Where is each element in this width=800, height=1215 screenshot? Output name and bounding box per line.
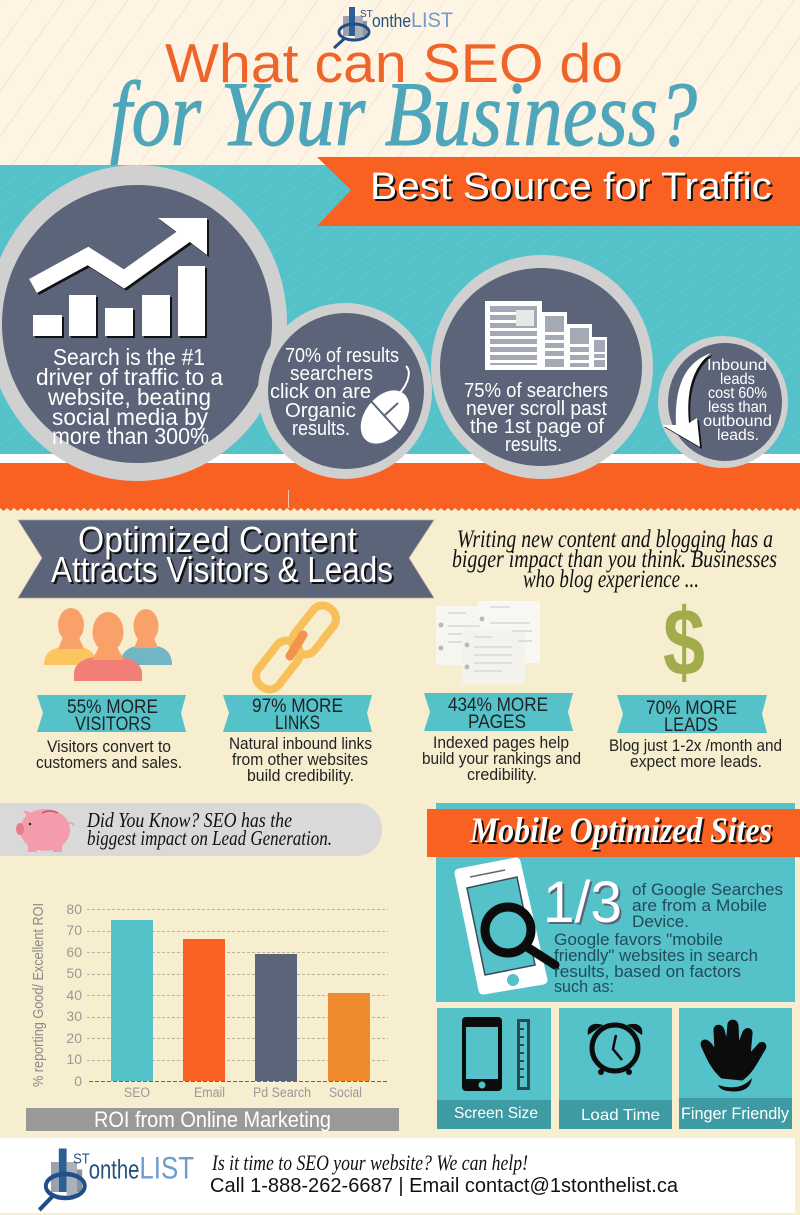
circle: organic results bbox=[258, 303, 432, 479]
text: inbound statistic: leads. bbox=[717, 427, 759, 444]
panel: more visitors bbox=[36, 608, 186, 772]
text: links description bbox=[229, 734, 372, 785]
text: lead generation fact: Did You Know? SEO has the bbox=[86, 808, 292, 832]
text: blogging intro: who blog experience ... bbox=[523, 566, 699, 593]
circle: inbound leads bbox=[658, 336, 788, 468]
logo: 1st on the list (footer): onthe bbox=[89, 1155, 139, 1185]
icon: phone and ruler bbox=[462, 1017, 530, 1091]
banner: optimized content: Optimized Content bbox=[78, 519, 357, 560]
x axis labels: Pd Search bbox=[253, 1085, 311, 1100]
text: inbound statistic bbox=[703, 357, 772, 444]
logo: 1st on the list (footer): ST bbox=[73, 1150, 90, 1167]
chart title: ROI from Online Marketing bbox=[94, 1107, 331, 1132]
text: pages description: Indexed pages help bbox=[433, 733, 569, 752]
text: search statistic: driver of traffic to a bbox=[36, 364, 223, 390]
icon: phone with magnifier bbox=[459, 862, 555, 990]
text: leads description: expect more leads. bbox=[630, 752, 762, 771]
text: search statistic bbox=[36, 344, 223, 449]
title bbox=[110, 32, 697, 165]
panel: mobile optimized sites bbox=[427, 803, 800, 1002]
text: inbound statistic: less than bbox=[708, 399, 767, 416]
ribbon: 70% more leads bbox=[617, 695, 767, 736]
y axis title: % reporting Good/ Excellent ROI bbox=[31, 903, 47, 1087]
y axis labels: 50 bbox=[66, 965, 82, 981]
text: call to action: Is it time to SEO your website? We can help! bbox=[211, 1150, 528, 1175]
banner: optimized content: Attracts Visitors & Leads bbox=[51, 549, 393, 590]
text: visitors description bbox=[36, 737, 182, 772]
text: mobile friendly: friendly" websites in search bbox=[554, 946, 758, 965]
text: google searches: of Google Searches bbox=[632, 880, 783, 899]
text: visitors description: Visitors convert to bbox=[47, 737, 171, 756]
icon: piggy bank bbox=[16, 809, 74, 852]
text: search statistic: more than 300% bbox=[52, 423, 209, 449]
logo: 1st on the list (footer) bbox=[39, 1148, 194, 1210]
text: pages description bbox=[422, 733, 581, 784]
text: search statistic: website, beating bbox=[47, 384, 211, 410]
panel: more leads bbox=[609, 589, 782, 771]
text: pages description: credibility. bbox=[467, 765, 537, 784]
panel: footer bbox=[0, 1138, 795, 1213]
text: scroll statistic: 75% of searchers bbox=[464, 380, 608, 402]
bars bbox=[111, 920, 370, 1081]
text: search statistic: social media by bbox=[52, 404, 208, 430]
banner: optimized content bbox=[18, 519, 434, 598]
y axis labels: 10 bbox=[66, 1051, 82, 1067]
icon: stacked documents bbox=[436, 601, 540, 684]
icon: dollar sign: $ bbox=[663, 589, 705, 696]
callout: did you know bbox=[0, 803, 382, 856]
text: organic statistic bbox=[270, 345, 399, 440]
text: inbound statistic: leads bbox=[720, 371, 755, 388]
title: for Your Business? bbox=[110, 63, 697, 165]
tile: finger friendly bbox=[679, 1008, 792, 1129]
logo: 1st on the list (header) bbox=[334, 7, 453, 48]
tile: load time bbox=[559, 1008, 672, 1129]
y axis labels: 20 bbox=[66, 1030, 82, 1046]
icon: shrinking result pages bbox=[485, 301, 607, 370]
x axis labels: Social bbox=[329, 1085, 362, 1100]
ribbon: 55% more visitors bbox=[37, 695, 186, 735]
text: inbound statistic: cost 60% bbox=[708, 385, 767, 402]
text: pages description: build your rankings and bbox=[422, 749, 581, 768]
y axis labels: 70 bbox=[66, 922, 82, 938]
ribbon: 55% more visitors: 55% MORE bbox=[67, 697, 158, 718]
text: links description: from other websites bbox=[232, 750, 368, 769]
icon: computer mouse bbox=[351, 366, 419, 453]
logo: 1st on the list (header): LIST bbox=[411, 9, 453, 32]
text: mobile friendly: results, based on factors bbox=[554, 962, 741, 981]
ribbon: 434% more pages bbox=[424, 693, 573, 733]
x axis labels bbox=[124, 1085, 362, 1100]
x axis labels: SEO bbox=[124, 1085, 150, 1100]
circle: first page of results bbox=[431, 255, 653, 479]
tile: screen size bbox=[437, 1008, 551, 1129]
text: lead generation fact: biggest impact on Lead Generation. bbox=[87, 826, 332, 850]
y axis labels: 60 bbox=[66, 944, 82, 960]
stat: one third: 1/3 bbox=[543, 870, 622, 935]
text: links description: build credibility. bbox=[247, 766, 354, 785]
panel: best source for traffic bbox=[0, 157, 800, 511]
text: blogging intro bbox=[452, 526, 777, 593]
text: scroll statistic: results. bbox=[505, 434, 562, 456]
icon: curved down arrow bbox=[662, 353, 711, 447]
text: scroll statistic bbox=[464, 380, 608, 456]
text: mobile friendly bbox=[554, 930, 758, 996]
text: google searches: Device. bbox=[632, 912, 689, 931]
icon: hand bbox=[702, 1021, 765, 1091]
text: visitors description: customers and sales. bbox=[36, 753, 182, 772]
panel: more links bbox=[223, 601, 372, 785]
text: contact details: Call 1-888-262-6687 | Email contact@1stonthelist.ca bbox=[210, 1175, 679, 1197]
circle: search is the number one driver bbox=[0, 165, 287, 481]
tile: load time: Load Time bbox=[581, 1107, 660, 1124]
y axis labels: 0 bbox=[74, 1073, 82, 1089]
icon: alarm clock bbox=[588, 1024, 642, 1075]
ribbon: 97% more links: 97% MORE bbox=[252, 696, 343, 717]
text: leads description bbox=[609, 736, 782, 771]
text: mobile friendly: Google favors "mobile bbox=[554, 930, 723, 949]
text: search statistic: Search is the #1 bbox=[53, 344, 205, 370]
text: organic statistic: searchers bbox=[290, 363, 373, 385]
text: links description: Natural inbound links bbox=[229, 734, 372, 753]
text: mobile friendly: such as: bbox=[554, 977, 614, 996]
ribbon: 97% more links: LINKS bbox=[275, 713, 320, 734]
banner: best source for traffic bbox=[317, 157, 800, 226]
y axis labels: 40 bbox=[66, 987, 82, 1003]
y axis labels bbox=[66, 901, 82, 1089]
text: organic statistic: Organic bbox=[285, 400, 356, 422]
text: google searches bbox=[632, 880, 783, 931]
y axis labels: 80 bbox=[66, 901, 82, 917]
tile: finger friendly: Finger Friendly bbox=[681, 1105, 790, 1123]
text: inbound statistic: Inbound bbox=[707, 357, 767, 374]
text: google searches: are from a Mobile bbox=[632, 896, 767, 915]
x axis labels: Email bbox=[194, 1085, 225, 1100]
text: leads description: Blog just 1-2x /month and bbox=[609, 736, 782, 755]
tile: screen size: Screen Size bbox=[454, 1105, 538, 1122]
ribbon: 434% more pages: PAGES bbox=[468, 712, 526, 733]
icon: people bbox=[44, 608, 172, 681]
icon: rising bar chart bbox=[33, 218, 207, 336]
title: What can SEO do bbox=[165, 32, 623, 94]
logo: 1st on the list (footer): LIST bbox=[139, 1151, 194, 1186]
ribbon: 97% more links bbox=[223, 695, 372, 734]
y axis labels: 30 bbox=[66, 1008, 82, 1024]
icon: chain link bbox=[251, 601, 341, 694]
ribbon: 434% more pages: 434% MORE bbox=[448, 695, 548, 716]
ribbon: 70% more leads: 70% MORE bbox=[646, 698, 737, 719]
text: lead generation fact bbox=[86, 808, 332, 850]
panel: more pages bbox=[422, 601, 581, 784]
text: scroll statistic: never scroll past bbox=[466, 398, 607, 420]
text: scroll statistic: the 1st page of bbox=[470, 416, 604, 438]
logo: 1st on the list (header): onthe bbox=[372, 11, 411, 31]
text: organic statistic: results. bbox=[292, 418, 350, 440]
ribbon: 55% more visitors: VISITORS bbox=[75, 714, 151, 735]
logo: 1st on the list (header): ST bbox=[360, 9, 373, 20]
banner: best source for traffic: Best Source for Traffic bbox=[370, 166, 772, 208]
text: organic statistic: 70% of results bbox=[285, 345, 399, 367]
bar chart: ROI from online marketing bbox=[26, 901, 399, 1132]
text: inbound statistic: outbound bbox=[703, 413, 772, 430]
ribbon: 70% more leads: LEADS bbox=[664, 715, 718, 736]
text: organic statistic: click on are bbox=[270, 381, 371, 403]
